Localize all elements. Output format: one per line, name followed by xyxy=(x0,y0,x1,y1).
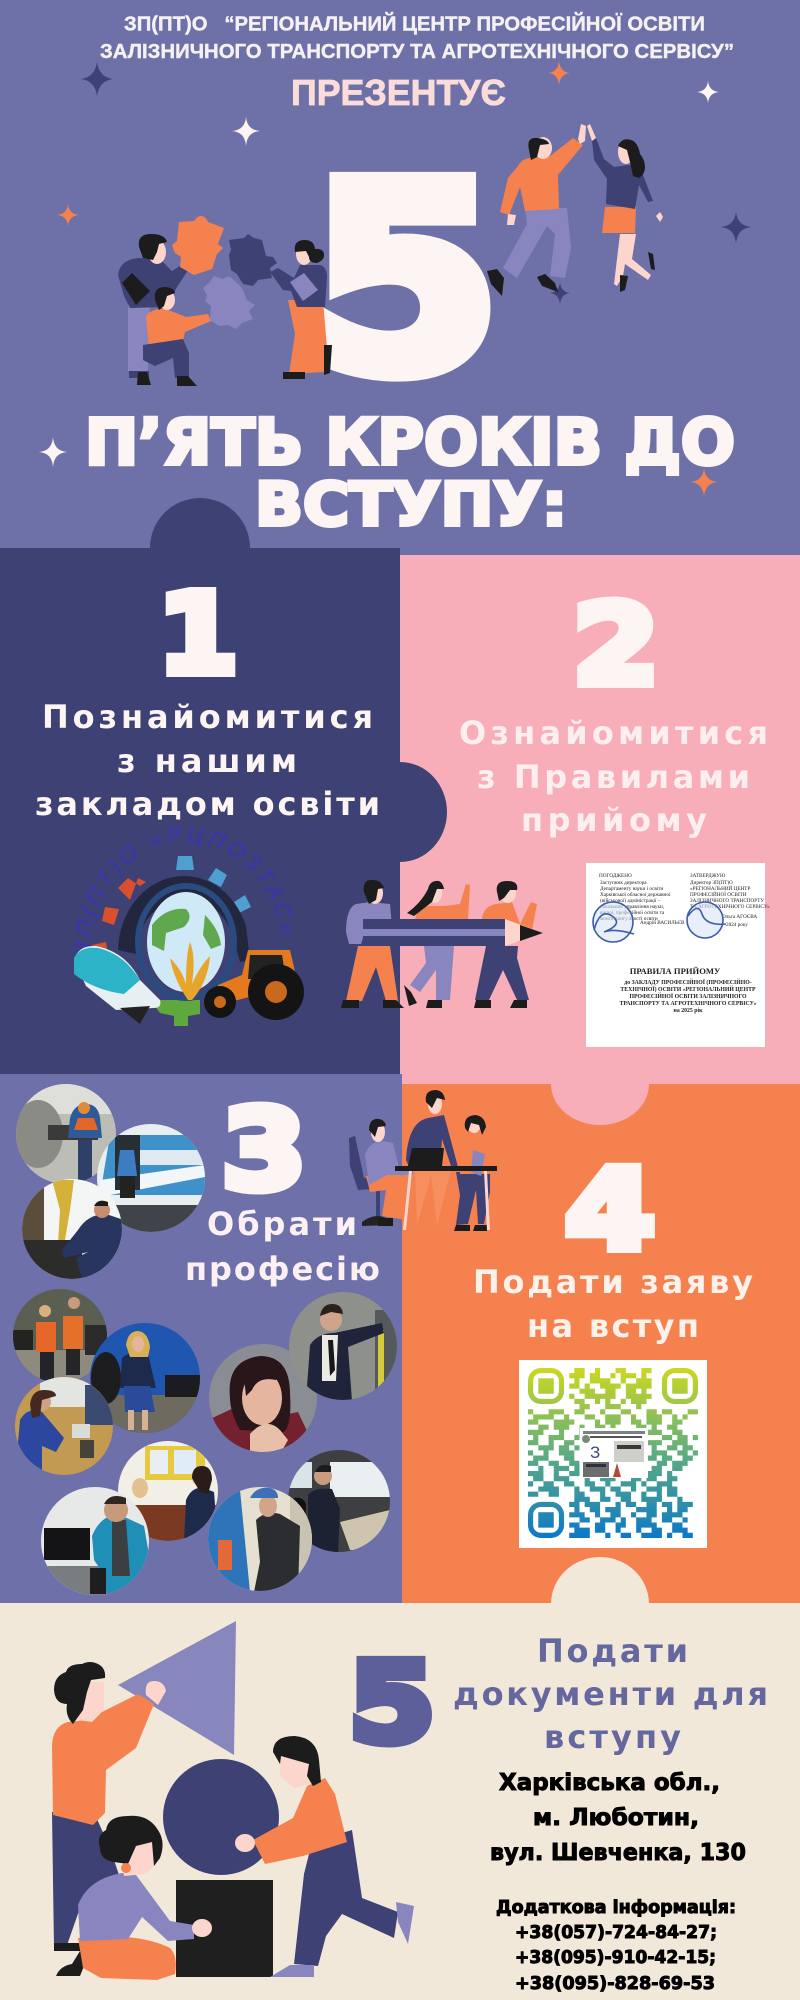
QR centre image: З xyxy=(590,1443,600,1462)
step 3 text: Обрати xyxy=(207,1205,357,1243)
panel: top background xyxy=(0,0,800,560)
photo: woman at desk xyxy=(15,1377,115,1476)
circle xyxy=(163,1759,279,1875)
address: Харківська обл., xyxy=(499,1770,720,1796)
puzzle knob: beige into orange xyxy=(551,1557,649,1651)
left person xyxy=(52,1662,166,1976)
document: admission rules: Андрій ВАСИЛЬЄВ xyxy=(640,919,685,926)
document: admission rules: начальник управління науки, xyxy=(600,904,664,910)
chair xyxy=(349,1136,392,1226)
header: institution name xyxy=(100,12,734,63)
step 2 text: з Правилами xyxy=(477,758,750,796)
big number 5: 5 xyxy=(310,130,500,430)
step 1 text: з нашим xyxy=(117,742,297,780)
panel: step 5 beige xyxy=(0,1603,800,2000)
step 4 text: Подати заяву xyxy=(473,1263,753,1301)
step 4 number: 4 xyxy=(565,1146,655,1274)
illustration: team at desk xyxy=(349,1090,497,1231)
step 2 text: прийому xyxy=(521,801,707,839)
document: admission rules: до ЗАКЛАДУ ПРОФЕСІЙНОЇ (ПРОФЕСІЙНО- xyxy=(624,978,752,986)
document: admission rules: Заступник директора xyxy=(600,880,647,886)
document: admission rules: Харківської обласної державної xyxy=(600,891,671,898)
jumping man xyxy=(487,124,586,296)
logo tractor xyxy=(204,950,304,1020)
document: admission rules: ТРАНСПОРТУ ТА АГРОТЕХНІЧНОГО СЕРВІСУ» xyxy=(620,1001,757,1007)
seated person xyxy=(78,1816,212,1980)
panel: step 2 pink xyxy=(400,555,800,1085)
photo: workers in vests xyxy=(13,1289,110,1385)
document: admission rules: ПОГОДЖЕНО xyxy=(599,873,632,879)
person 1 xyxy=(341,880,404,1008)
right person xyxy=(235,1736,414,1977)
step 3 number: 3 xyxy=(222,1086,306,1214)
document: admission rules xyxy=(586,863,770,1047)
document: admission rules: ПРОФЕСІЙНОЇ ОСВІТИ ЗАЛІЗНИЧНОГО xyxy=(629,992,747,1000)
step 3 text: професію xyxy=(185,1250,380,1288)
step 2 number: 2 xyxy=(573,581,659,709)
step 5 text xyxy=(453,1632,768,1756)
header: institution name: ЗП(ПТ)О “РЕГІОНАЛЬНИЙ ЦЕНТР ПРОФЕСІЙНОЇ ОСВІТИ xyxy=(124,12,705,36)
panel: step 4 orange xyxy=(402,1084,800,1604)
table xyxy=(395,1148,497,1230)
additional contact information xyxy=(496,1897,736,1994)
photo: driver in cab xyxy=(22,1179,124,1281)
step 5 text: документи для xyxy=(453,1675,768,1713)
illustration: high-five pair xyxy=(487,124,663,296)
heading: five steps to admission: П’ЯТЬ КРОКІВ ДО xyxy=(85,406,735,479)
woman with folder xyxy=(270,240,332,379)
document: admission rules: Директор ЗП(ПТ)О xyxy=(690,879,733,886)
document: admission rules: ПРОФЕСІЙНОЇ ОСВІТИ xyxy=(690,890,747,898)
document: admission rules: ЗАТВЕРДЖУЮ xyxy=(690,873,726,879)
document: admission rules: ТА АГРОТЕХНІЧНОГО СЕРВІСУ» xyxy=(690,904,770,910)
standing man xyxy=(406,1090,458,1225)
illustration: team carrying a pencil xyxy=(341,880,543,1008)
step 5 text: вступу xyxy=(544,1718,681,1756)
photo: reception desk xyxy=(118,1440,218,1543)
additional contact information: +38(095)-910-42-15; xyxy=(515,1947,716,1968)
header: institution name: ЗАЛІЗНИЧНОГО ТРАНСПОРТУ ТА АГРОТЕХНІЧНОГО СЕРВІСУ” xyxy=(100,41,734,63)
panel: step 1 navy xyxy=(0,498,400,1074)
document: admission rules: Департаменту науки і освіти xyxy=(600,886,664,892)
photo: woman portrait xyxy=(208,1343,318,1454)
illustration: team assembling shapes xyxy=(52,1621,414,1980)
document: admission rules: моніторингу якості освіти xyxy=(600,916,658,922)
standing woman xyxy=(454,1115,496,1231)
step 4 text xyxy=(473,1263,753,1345)
photo: woman by blue locomotive xyxy=(90,1322,202,1435)
pencil xyxy=(363,919,543,946)
person 2 xyxy=(404,881,470,1008)
step 2 text: Ознайомитися xyxy=(459,714,768,752)
standing man xyxy=(118,234,190,378)
heading: presents: ПРЕЗЕНТУЄ xyxy=(291,72,506,113)
document: admission rules: ПРАВИЛА ПРИЙОМУ xyxy=(630,966,721,976)
QR centre image xyxy=(580,1428,648,1478)
logo train xyxy=(74,946,160,1024)
photo collage: professions xyxy=(13,1084,399,1596)
photo: wheelset worker xyxy=(13,1084,117,1184)
puzzle knob: navy into pink xyxy=(353,762,447,862)
additional contact information: +38(057)-724-84-27; xyxy=(515,1922,717,1943)
decorative stars xyxy=(39,61,752,497)
person 3 xyxy=(474,881,537,1008)
address: м. Люботин, xyxy=(533,1805,699,1831)
logo globe and wheat xyxy=(147,892,225,1000)
triangle xyxy=(118,1621,236,1755)
step 1 text: Познайомитися xyxy=(42,698,373,736)
photo: computer technician xyxy=(40,1486,150,1596)
puzzle pieces xyxy=(172,216,277,329)
puzzle knob: pink into orange xyxy=(551,1043,649,1125)
address: вул. Шевченка, 130 xyxy=(490,1840,746,1866)
logo: institution emblem xyxy=(74,827,304,1026)
step 4 text: на вступ xyxy=(527,1307,699,1345)
document: admission rules: «РЕГІОНАЛЬНИЙ ЦЕНТР xyxy=(690,884,750,892)
jumping woman xyxy=(587,124,663,292)
step 1 text xyxy=(35,698,380,823)
heading: five steps to admission xyxy=(85,406,735,540)
additional contact information: Додаткова інформація: xyxy=(496,1897,736,1918)
logo: institution emblem: ЗП(ПТ)О «РЦПОЗТАС» xyxy=(74,827,292,952)
seated woman xyxy=(365,1119,413,1226)
black box xyxy=(176,1880,273,1977)
logo gear xyxy=(92,856,251,1026)
photo: cab instructor xyxy=(288,1449,392,1554)
document: admission rules: 2024 року xyxy=(726,922,748,928)
step 3 text xyxy=(185,1205,380,1288)
document: admission rules: Ольга АГОЄВА xyxy=(722,914,757,920)
step 1 number: 1 xyxy=(158,570,238,698)
photo: technician in blue cap xyxy=(208,1486,314,1592)
address xyxy=(490,1770,746,1866)
step 5 text: Подати xyxy=(537,1632,688,1670)
document: admission rules: ЗАЛІЗНИЧНОГО ТРАНСПОРТУ xyxy=(690,898,764,904)
photo: conductor xyxy=(289,1292,399,1402)
document: admission rules: ТЕХНІЧНОЇ) ОСВІТИ «РЕГІОНАЛЬНИЙ ЦЕНТР xyxy=(620,985,756,993)
step 2 text xyxy=(459,714,768,839)
document: admission rules: вищої, професійної освіти та xyxy=(600,909,665,916)
additional contact information: +38(095)-828-69-53 xyxy=(515,1973,715,1994)
step 5 number: 5 xyxy=(349,1639,435,1767)
QR code xyxy=(519,1360,707,1548)
illustration: puzzle team xyxy=(118,216,332,386)
document: admission rules: на 2025 рік xyxy=(674,1008,703,1014)
heading: five steps to admission: ВСТУПУ: xyxy=(255,470,567,540)
logo arc text xyxy=(90,842,282,955)
document: admission rules: (військової) адміністрації – xyxy=(600,897,661,904)
photo: locomotive xyxy=(97,1123,210,1233)
step 1 text: закладом освіти xyxy=(35,785,380,823)
document stamps xyxy=(593,902,726,942)
panel: step 3 purple xyxy=(0,1074,402,1604)
crouching man xyxy=(137,287,211,386)
